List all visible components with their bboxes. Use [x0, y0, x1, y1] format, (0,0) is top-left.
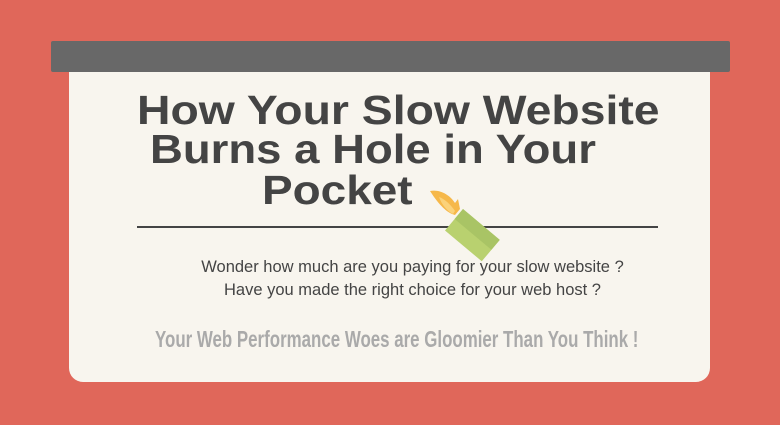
panel: cream card: [69, 66, 710, 382]
subtitle text: Have you made the right choice for your web host ?: [224, 281, 601, 299]
tagline: Your Web Performance Woes are Gloomier Than You Think !: [155, 326, 638, 352]
title: [137, 87, 660, 213]
title line 1: How Your Slow Website: [137, 87, 660, 133]
top gray bar: [51, 41, 730, 72]
subtitle text: Wonder how much are you paying for your slow website ?: [201, 258, 624, 276]
title line 2: Burns a Hole in Your: [150, 126, 596, 172]
subtitle text: [201, 258, 624, 299]
title line 3: Pocket: [262, 167, 413, 213]
icon: candle: [430, 190, 500, 262]
divider line: [137, 226, 658, 228]
